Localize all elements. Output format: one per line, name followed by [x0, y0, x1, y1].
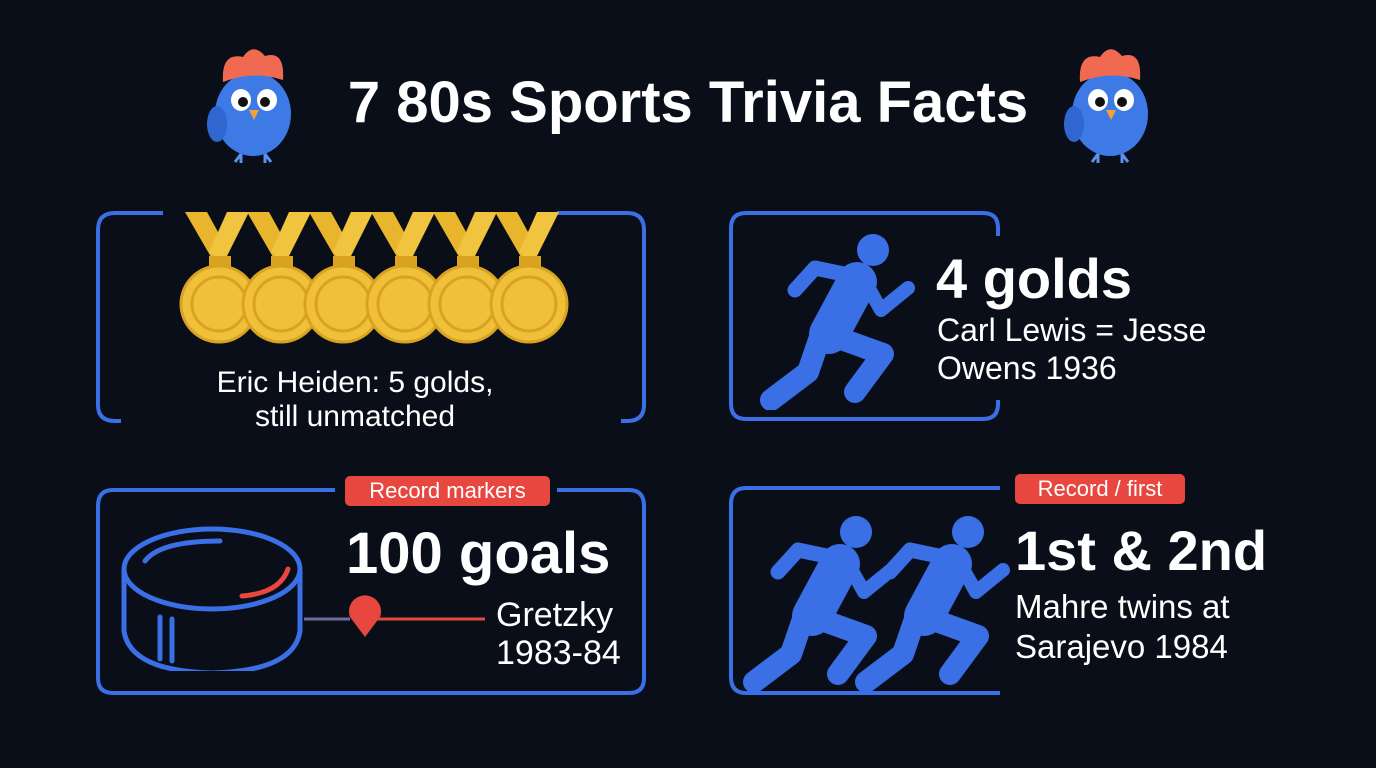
text: Carl Lewis [937, 312, 1206, 386]
icon: six gold medals [180, 212, 568, 344]
heading: 1st & 2nd: 1st & 2nd [1015, 519, 1267, 582]
icon: hockey puck [122, 526, 485, 671]
text: Eric Heiden: still unmatched [255, 400, 455, 433]
icon: mascot left [207, 49, 291, 163]
icon: two runners [743, 516, 1010, 691]
label: Record markers: Record markers [369, 478, 526, 503]
label: Record / first: Record / first [1038, 476, 1162, 501]
heading: 4 golds: 4 golds [936, 247, 1132, 310]
icon: runner [760, 234, 915, 410]
title: 7 80s Sports Trivia Facts [348, 70, 1028, 135]
text: Gretzky: Gretzky [496, 596, 613, 634]
text: Mahre twins: Mahre twins at [1015, 588, 1230, 625]
text: Eric Heiden [217, 366, 493, 433]
icon: mascot right [1064, 49, 1148, 163]
text: Eric Heiden: Eric Heiden: 5 golds, [217, 366, 493, 399]
panel: Eric Heiden [96, 211, 646, 433]
panel: Carl Lewis [729, 211, 1206, 421]
text: Mahre twins: Sarajevo 1984 [1015, 628, 1228, 665]
panel: Mahre twins [729, 474, 1267, 695]
text: Mahre twins [1015, 588, 1230, 665]
panel: Gretzky [96, 476, 646, 695]
label: Record / first [1015, 474, 1185, 504]
text: Gretzky [496, 596, 621, 672]
text: Carl Lewis: Owens 1936 [937, 350, 1117, 386]
label: Record markers [345, 476, 550, 506]
heading: 100 goals: 100 goals [346, 521, 610, 586]
text: Gretzky: 1983-84 [496, 634, 621, 672]
text: Carl Lewis: Carl Lewis = Jesse [937, 312, 1206, 348]
